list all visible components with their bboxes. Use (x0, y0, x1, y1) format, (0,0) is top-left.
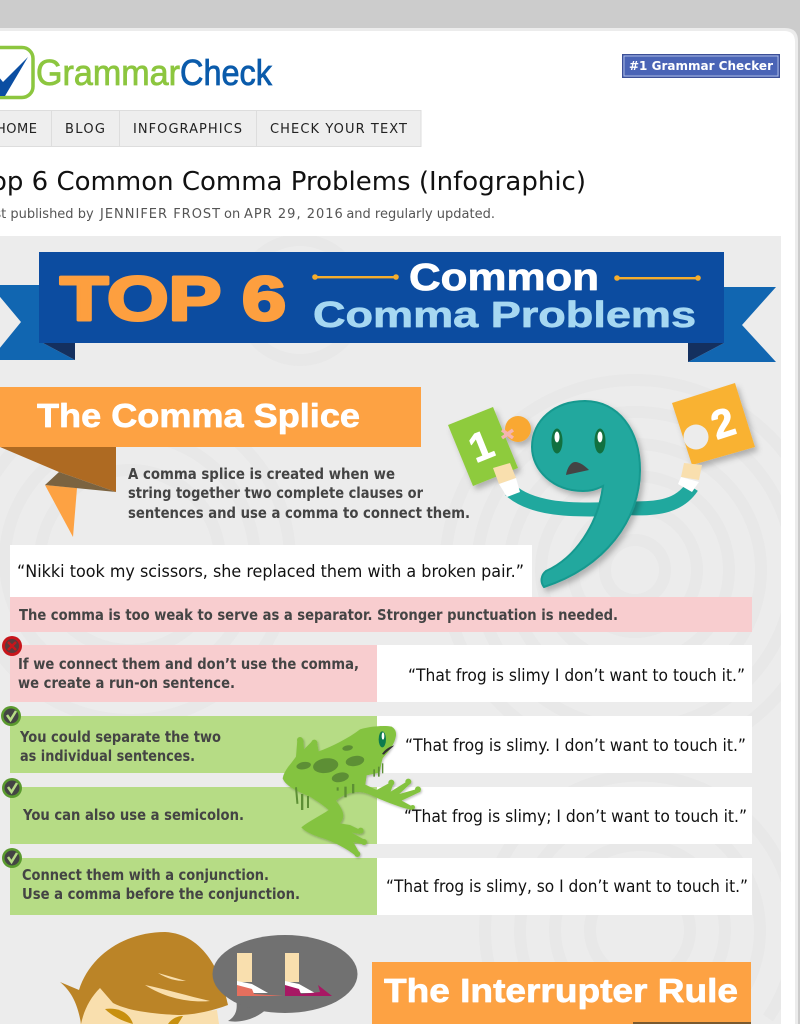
row: run-on sentence: “That frog is slimy I don’t want to touch it.” (408, 666, 745, 686)
puzzle piece 2: 2 (706, 400, 741, 448)
row: conjunction: Use a comma before the conjunction. (22, 885, 300, 903)
row: semicolon: You can also use a semicolon. (22, 806, 244, 824)
example sentence box (10, 545, 532, 597)
icon: check (2, 848, 22, 868)
gloves (493, 463, 516, 484)
navigation bar: INFOGRAPHICS (133, 122, 242, 137)
frog illustration (283, 726, 421, 857)
main ribbon: Common (409, 257, 599, 299)
main ribbon (0, 252, 776, 362)
comma splice description: sentences and use a comma to connect them. (128, 504, 470, 522)
row: conjunction: “That frog is slimy, so I don’t want to touch it.” (386, 877, 748, 897)
byline: on (224, 207, 240, 222)
comma splice description (128, 468, 469, 518)
badge: #1 Grammar Checker (622, 54, 780, 78)
row: separate sentences: “That frog is slimy. I don’t want to touch it.” (405, 736, 746, 756)
speech bubble with quotation marks (212, 935, 358, 1022)
navigation bar: BLOG (65, 122, 105, 137)
icon: check (1, 706, 21, 726)
row: separate sentences: You could separate the two (19, 728, 221, 746)
puzzle piece 1: 1 (463, 422, 500, 471)
row: conjunction (2, 848, 752, 915)
byline: and regularly updated. (346, 207, 495, 222)
hair highlight (145, 973, 210, 1001)
explanation bar: The comma is too weak to serve as a separator. Stronger punctuation is needed. (19, 606, 618, 624)
example sentence box: “Nikki took my scissors, she replaced them with a broken pair.” (17, 562, 524, 582)
puzzle piece 1 (448, 407, 531, 486)
navigation bar: CHECK YOUR TEXT (270, 122, 407, 137)
comma character holding puzzle pieces (448, 383, 755, 587)
section banner: The Comma Splice (0, 387, 421, 537)
explanation bar (10, 597, 752, 632)
row: run-on sentence: we create a run-on sentence. (18, 674, 235, 692)
quote mark 2 (285, 953, 332, 996)
quote mark 1 (237, 953, 284, 996)
row: run-on sentence: If we connect them and don’t use the comma, (18, 655, 359, 673)
comma splice description: string together two complete clauses or (128, 484, 424, 502)
logo: Check (180, 52, 273, 93)
row: conjunction: Connect them with a conjunction. (22, 866, 269, 884)
logo (0, 48, 273, 98)
main ribbon: Comma Problems (313, 294, 696, 335)
section banner: The Comma Splice: The Comma Splice (37, 397, 360, 434)
mouth (566, 462, 589, 475)
face (80, 986, 219, 1024)
row: run-on sentence (2, 636, 752, 702)
byline: JENNIFER FROST (99, 207, 221, 222)
row: separate sentences: as individual sentences. (20, 747, 195, 765)
navigation bar (0, 110, 421, 147)
logo: Grammar (36, 52, 180, 93)
arms (510, 487, 692, 510)
section banner: The Interrupter Rule (372, 962, 751, 1024)
row: semicolon: “That frog is slimy; I don’t want to touch it.” (404, 807, 747, 827)
row: separate sentences (1, 706, 752, 773)
icon: red cross (2, 636, 22, 656)
puzzle piece 2 (672, 383, 755, 465)
main ribbon: TOP 6 (60, 265, 286, 334)
eyebrows (105, 1009, 133, 1024)
infographic (0, 236, 800, 1024)
hair (60, 932, 228, 1024)
badge: #1 Grammar Checker: #1 Grammar Checker (629, 58, 774, 73)
row: semicolon (2, 778, 752, 844)
byline: APR 29, 2016 (244, 207, 344, 222)
boy character (60, 932, 228, 1024)
icon: check (2, 778, 22, 798)
comma splice description: A comma splice is created when we (128, 465, 395, 483)
eyes (552, 428, 562, 454)
section banner: The Interrupter Rule: The Interrupter Rule (384, 972, 738, 1009)
comma body (532, 401, 640, 587)
byline (0, 207, 495, 222)
